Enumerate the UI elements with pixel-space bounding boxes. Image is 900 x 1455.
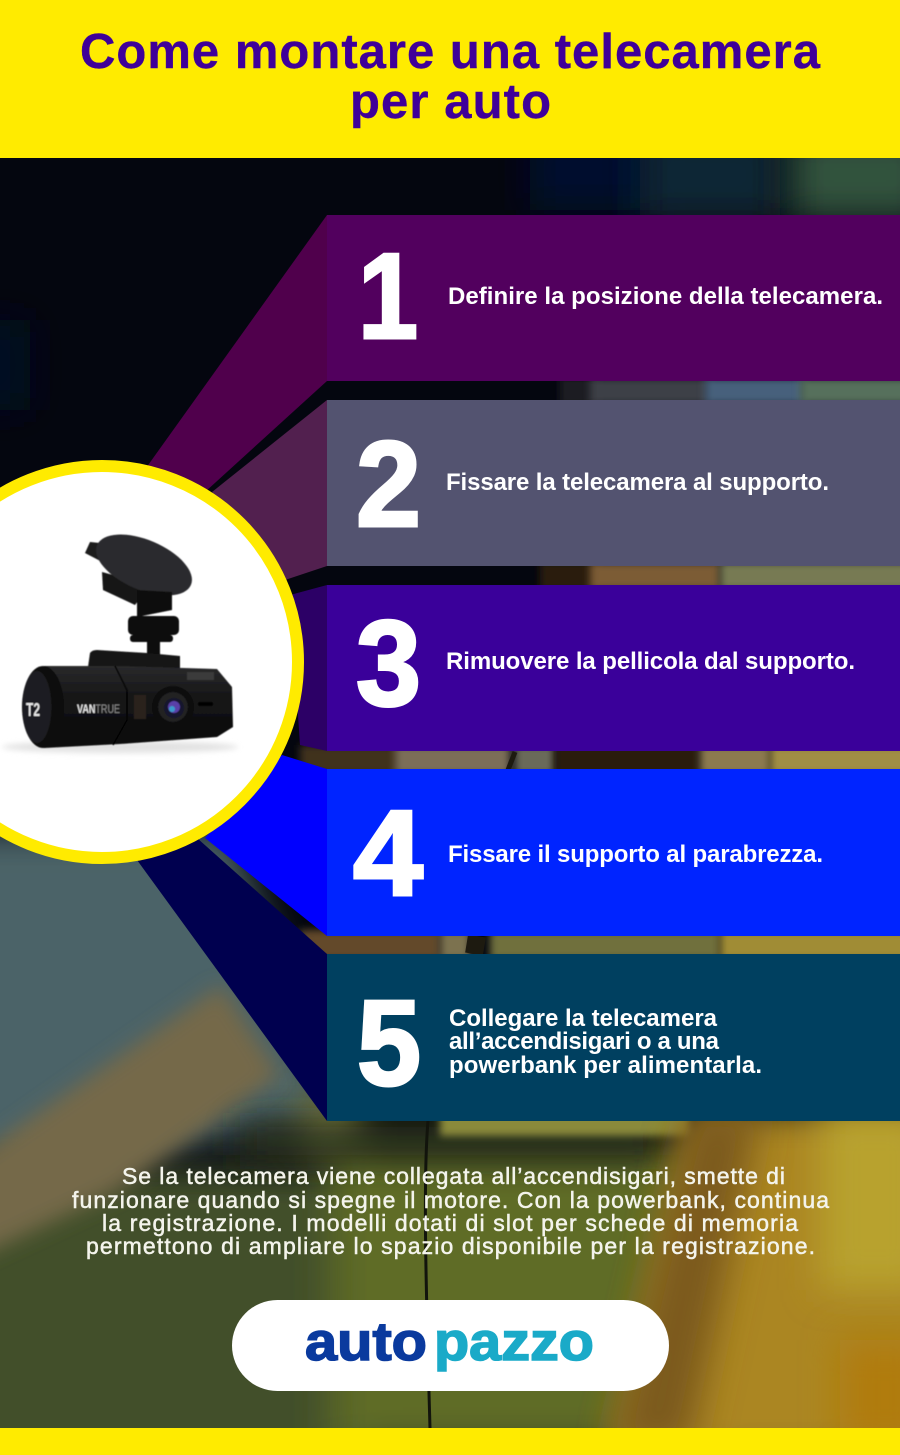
step 1: wedge and panel — [146, 215, 900, 492]
closing paragraph: funzionare quando si spegne il motore. Con la powerbank, continua — [72, 1187, 829, 1213]
step 5: wedge and panel — [137, 838, 900, 1121]
step 4: wedge and panel — [205, 755, 900, 936]
step 3 number: 3 — [356, 595, 421, 731]
step 3 text: Rimuovere la pellicola dal supporto. — [446, 648, 855, 675]
step 5 text: Collegare la telecamera — [449, 1005, 718, 1032]
closing paragraph: Se la telecamera viene collegata all’accendisigari, smette di — [122, 1163, 785, 1189]
step 5 text: powerbank per alimentarla. — [449, 1052, 762, 1079]
step 5 number: 5 — [357, 975, 421, 1111]
step 2: wedge and panel — [212, 400, 900, 580]
lens — [152, 686, 194, 728]
step 5 text: all’accendisigari o a una — [449, 1028, 720, 1055]
camera circle — [0, 466, 298, 858]
footer band — [0, 1428, 900, 1455]
logo: autopazzo: pazzo — [434, 1312, 594, 1372]
suction mount — [85, 542, 108, 565]
logo pill — [232, 1300, 669, 1391]
camera labels: T2 — [26, 700, 40, 720]
step 2 text: Fissare la telecamera al supporto. — [446, 469, 829, 496]
title: Come montare una telecamera — [80, 25, 821, 79]
title: per auto — [350, 75, 551, 129]
step 3: wedge and panel — [290, 585, 900, 751]
step 1 text: Definire la posizione della telecamera. — [448, 283, 883, 310]
header band — [0, 0, 900, 158]
step 5 text — [449, 1005, 762, 1079]
closing paragraph — [72, 1163, 829, 1259]
step 2 number: 2 — [356, 416, 421, 552]
closing paragraph: permettono di ampliare lo spazio disponibile per la registrazione. — [86, 1233, 815, 1259]
camera body — [44, 666, 233, 748]
icon: dash camera — [22, 522, 233, 748]
logo: autopazzo — [305, 1312, 594, 1372]
step 4 text: Fissare il supporto al parabrezza. — [448, 841, 823, 868]
closing paragraph: la registrazione. I modelli dotati di slot per schede di memoria — [102, 1210, 798, 1236]
bracket — [88, 650, 180, 677]
step 4 number: 4 — [353, 785, 423, 921]
step 1 number: 1 — [358, 228, 418, 364]
icon: dash camera: VANTRUE — [77, 702, 120, 716]
title — [80, 25, 821, 129]
camera shadow — [2, 741, 238, 753]
logo: autopazzo: auto — [305, 1312, 427, 1372]
